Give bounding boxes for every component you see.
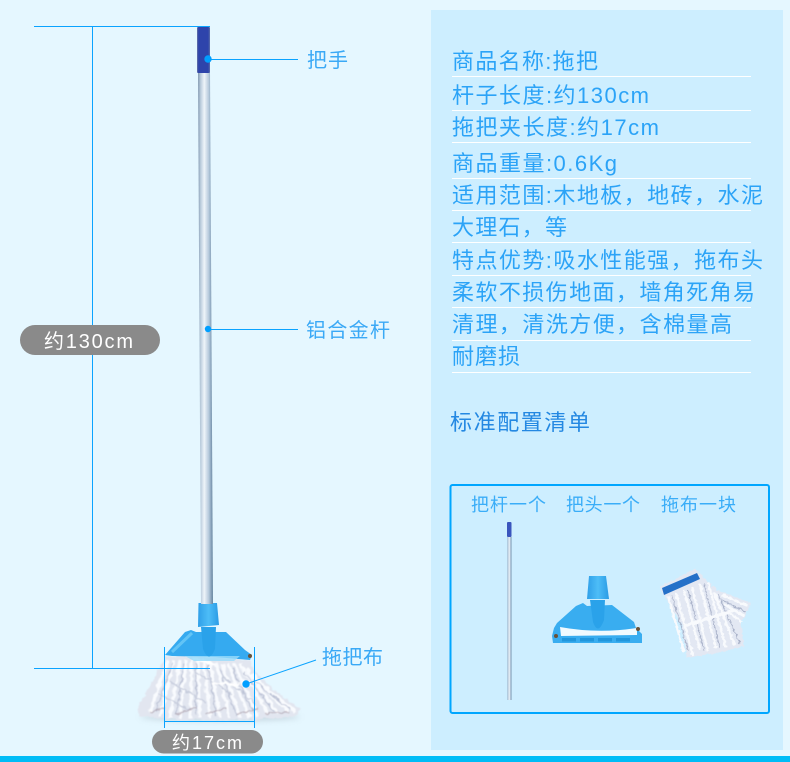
specification text: 大理石，等 xyxy=(452,215,567,240)
panel: specifications xyxy=(431,10,783,750)
pole xyxy=(198,72,213,604)
item labels: 把头一个 xyxy=(566,495,640,515)
heading: standard configuration list: 标准配置清单 xyxy=(450,410,590,435)
specification text: 杆子长度:约130cm xyxy=(452,83,649,108)
mop cloth head xyxy=(137,655,300,721)
specification text xyxy=(452,49,763,369)
specification text: 耐磨损 xyxy=(452,344,520,369)
mop clip xyxy=(165,603,252,661)
specification text: 清理，清洗方便，含棉量高 xyxy=(452,312,732,337)
item labels: 把杆一个 xyxy=(471,495,546,515)
callout: mop cloth: 拖把布 xyxy=(322,646,383,669)
specification text: 拖把夹长度:约17cm xyxy=(452,115,659,140)
mop illustration xyxy=(137,27,300,721)
handle grip xyxy=(197,27,210,73)
pill: 130cm: 约130cm xyxy=(44,330,133,353)
item labels: 拖布一块 xyxy=(661,495,736,515)
specification dividers xyxy=(452,76,751,373)
callout: handle: 把手 xyxy=(307,49,348,72)
specification text: 柔软不损伤地面，墙角死角易 xyxy=(452,280,755,305)
item: mop clip xyxy=(552,576,642,643)
panel: included items xyxy=(450,485,769,713)
callout: aluminium pole: 铝合金杆 xyxy=(306,319,390,342)
callout: handle xyxy=(204,49,348,72)
item: mop cloth xyxy=(659,569,751,658)
bottom colour bar xyxy=(0,756,790,762)
callout: aluminium pole xyxy=(205,319,390,342)
specification text: 适用范围:木地板，地砖，水泥 xyxy=(452,183,763,208)
pill: 130cm xyxy=(20,325,160,355)
pill: 17cm: 约17cm xyxy=(172,733,242,753)
specification text: 特点优势:吸水性能强，拖布头 xyxy=(452,248,763,273)
callout: mop cloth xyxy=(242,646,383,688)
specification text: 商品重量:0.6Kg xyxy=(452,151,617,176)
item: pole xyxy=(507,522,512,700)
item labels xyxy=(471,495,736,515)
dimension: overall height 130cm xyxy=(20,26,210,668)
specification text: 商品名称:拖把 xyxy=(452,49,598,74)
dimension: mop width 17cm xyxy=(152,647,263,754)
